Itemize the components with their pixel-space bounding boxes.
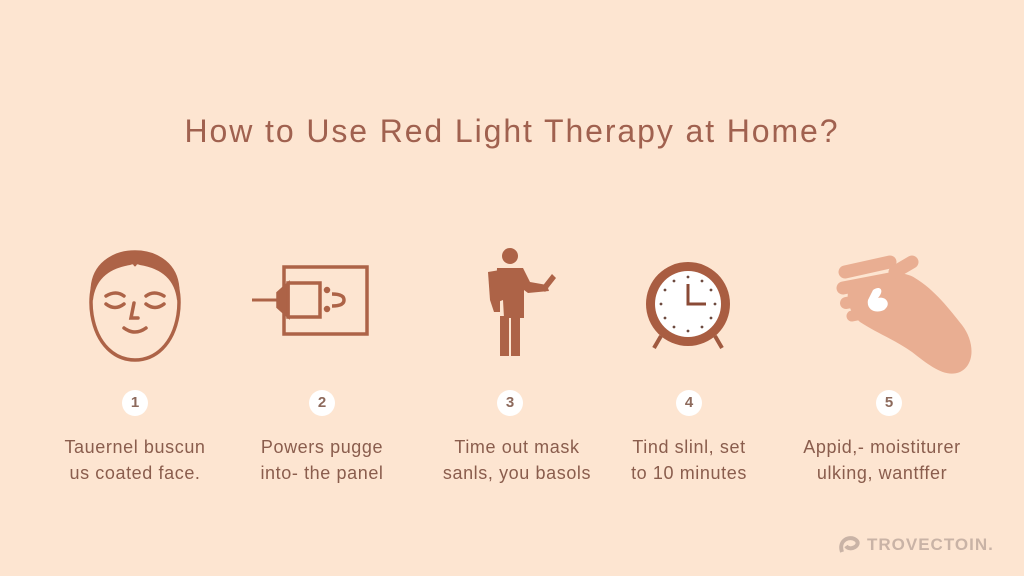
step 3 [443, 390, 591, 483]
text: to 10 minutes [631, 463, 747, 483]
logo icon [841, 538, 858, 552]
text: into- the panel [260, 463, 384, 483]
text: 3 [506, 394, 514, 411]
icon: person [488, 248, 556, 356]
text: us coated face. [69, 463, 201, 483]
step 1 [64, 390, 206, 483]
icon: hand [843, 262, 972, 374]
text: 4 [685, 394, 693, 411]
title: How to Use Red Light Therapy at Home? [185, 113, 839, 149]
text: 2 [318, 394, 326, 411]
icon: plug [252, 267, 367, 334]
text: sanls, you basols [443, 463, 591, 483]
text: Appid,- moistiturer [803, 437, 961, 457]
icon: clock [646, 262, 730, 348]
text: 5 [885, 394, 893, 411]
step 4 [631, 390, 747, 483]
text: ulking, wantffer [817, 463, 947, 483]
step 2 [260, 390, 384, 483]
text: 1 [131, 394, 139, 411]
text: Time out mask [454, 437, 580, 457]
logo: TROVECTOIN. [867, 535, 994, 554]
text: Tind slinl, set [632, 437, 746, 457]
step 5 [803, 390, 961, 483]
icon: face [91, 252, 179, 360]
text: Powers pugge [261, 437, 383, 457]
text: Tauernel buscun [64, 437, 206, 457]
